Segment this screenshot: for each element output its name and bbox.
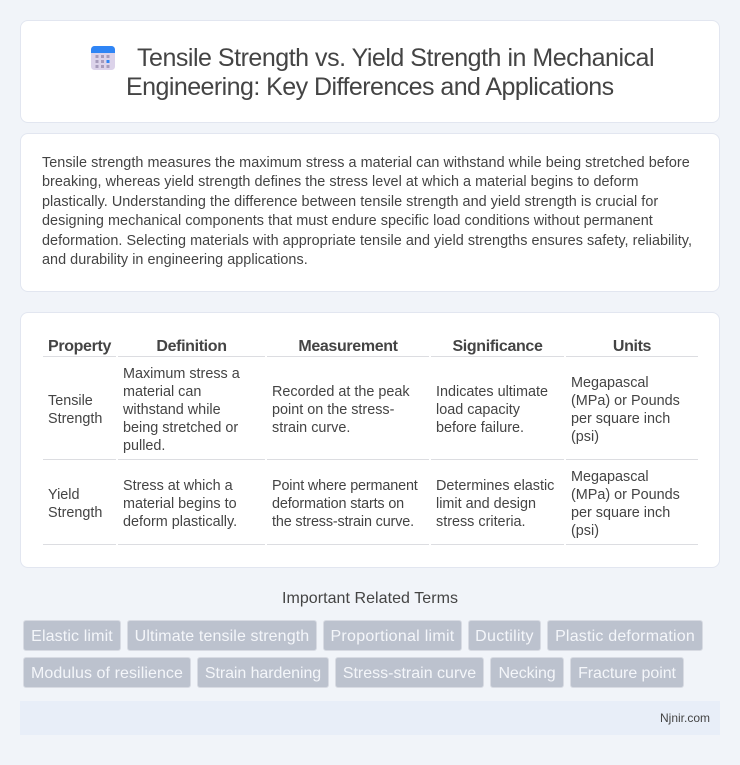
- row: Yield Strength significance: limit and design: [436, 496, 536, 512]
- row: Tensile Strength units: (MPa) or Pounds: [571, 393, 680, 409]
- tag: [468, 620, 541, 651]
- tag: Modulus of resilience: [31, 665, 183, 682]
- row: Yield Strength definition: [123, 478, 237, 530]
- tag: Fracture point: [578, 665, 676, 682]
- header: Property: Property: [48, 338, 111, 355]
- intro text: [42, 155, 692, 268]
- title card: [20, 20, 720, 123]
- header: Significance: Significance: [452, 338, 543, 355]
- row: Yield Strength property: Strength: [48, 505, 102, 521]
- row: Tensile Strength units: Megapascal: [571, 375, 649, 391]
- row: Tensile Strength definition: [123, 366, 240, 454]
- related terms tags: [23, 620, 703, 688]
- row: Tensile Strength measurement: point on the stress-: [272, 402, 394, 418]
- heading: [126, 44, 654, 101]
- row: Yield Strength definition: Stress at which a: [123, 478, 233, 494]
- tag: [570, 657, 684, 688]
- intro text: designing mechanical components that must endure specific load conditions without permanent: [42, 213, 653, 229]
- header: Definition: Definition: [156, 338, 227, 355]
- row: Yield Strength units: [571, 469, 680, 539]
- tag: [490, 657, 564, 688]
- row: Yield Strength definition: deform plastically.: [123, 514, 237, 530]
- row: Tensile Strength definition: being stretched or: [123, 420, 238, 436]
- tag: Proportional limit: [330, 628, 455, 645]
- tag: Ductility: [475, 628, 534, 645]
- row: Yield Strength measurement: [272, 478, 418, 530]
- intro text: plastically. Understanding the difference between tensile strength and yield strength is crucial for: [42, 194, 658, 210]
- footer bar: [20, 701, 720, 735]
- row: Yield Strength units: Megapascal: [571, 469, 649, 485]
- header: Units: Units: [613, 338, 651, 355]
- row: Yield Strength definition: material begins to: [123, 496, 237, 512]
- row: Yield Strength significance: stress criteria.: [436, 514, 526, 530]
- row: Tensile Strength property: Strength: [48, 411, 102, 427]
- tag: [335, 657, 484, 688]
- icon: calendar: [91, 46, 115, 70]
- tag: Necking: [498, 665, 556, 682]
- tag: [197, 657, 329, 688]
- row: Yield Strength property: Yield: [48, 487, 79, 503]
- heading: Engineering: Key Differences and Applications: [126, 73, 614, 101]
- tag: Ultimate tensile strength: [135, 628, 309, 645]
- row: Yield Strength significance: [436, 478, 554, 530]
- tag: [323, 620, 462, 651]
- tag: Stress-strain curve: [343, 665, 476, 682]
- row: Yield Strength significance: Determines elastic: [436, 478, 554, 494]
- row: Yield Strength measurement: Point where permanent: [272, 478, 418, 494]
- row: Tensile Strength significance: before failure.: [436, 420, 524, 436]
- row: Yield Strength measurement: the stress-strain curve.: [272, 514, 414, 530]
- row: Tensile Strength property: Tensile: [48, 393, 93, 409]
- row: Tensile Strength units: per square inch: [571, 411, 670, 427]
- row: Tensile Strength measurement: strain curve.: [272, 420, 350, 436]
- row: Tensile Strength definition: material can: [123, 384, 201, 400]
- row: Tensile Strength units: [571, 375, 680, 445]
- tag: [23, 620, 121, 651]
- tag: [547, 620, 703, 651]
- row: Tensile Strength property: [48, 393, 102, 427]
- footer brand: Njnir.com: [660, 711, 710, 725]
- heading: Tensile Strength vs. Yield Strength in Mechanical: [137, 44, 654, 72]
- tag: [127, 620, 317, 651]
- row: Tensile Strength significance: load capacity: [436, 402, 520, 418]
- intro card: [20, 133, 720, 292]
- tag: Strain hardening: [205, 665, 321, 682]
- intro text: breaking, whereas yield strength defines the stress level at which a material begins to deform: [42, 174, 638, 190]
- row: Yield Strength units: (MPa) or Pounds: [571, 487, 680, 503]
- intro text: deformation. Selecting materials with appropriate tensile and yield strengths ensures safety, reliability,: [42, 233, 692, 249]
- row: Tensile Strength measurement: Recorded at the peak: [272, 384, 410, 400]
- row: Yield Strength units: per square inch: [571, 505, 670, 521]
- row: Tensile Strength significance: [436, 384, 548, 436]
- tag: Elastic limit: [31, 628, 113, 645]
- row: Yield Strength measurement: deformation starts on: [272, 496, 404, 512]
- row: Tensile Strength definition: withstand while: [123, 402, 221, 418]
- intro text: and durability in engineering applications.: [42, 252, 308, 268]
- row: Tensile Strength significance: Indicates ultimate: [436, 384, 548, 400]
- tag: [23, 657, 191, 688]
- row: Yield Strength units: (psi): [571, 523, 599, 539]
- intro text: Tensile strength measures the maximum stress a material can withstand while being stretched before: [42, 155, 690, 171]
- table card: [20, 312, 720, 568]
- tag: Plastic deformation: [555, 628, 695, 645]
- row: Tensile Strength measurement: [272, 384, 410, 436]
- row: Tensile Strength units: (psi): [571, 429, 599, 445]
- row: Tensile Strength definition: pulled.: [123, 438, 165, 454]
- comparison table: [43, 338, 698, 545]
- row: Yield Strength property: [48, 487, 102, 521]
- row: Tensile Strength definition: Maximum stress a: [123, 366, 240, 382]
- header: Measurement: Measurement: [298, 338, 398, 355]
- related terms heading: Important Related Terms: [282, 590, 458, 607]
